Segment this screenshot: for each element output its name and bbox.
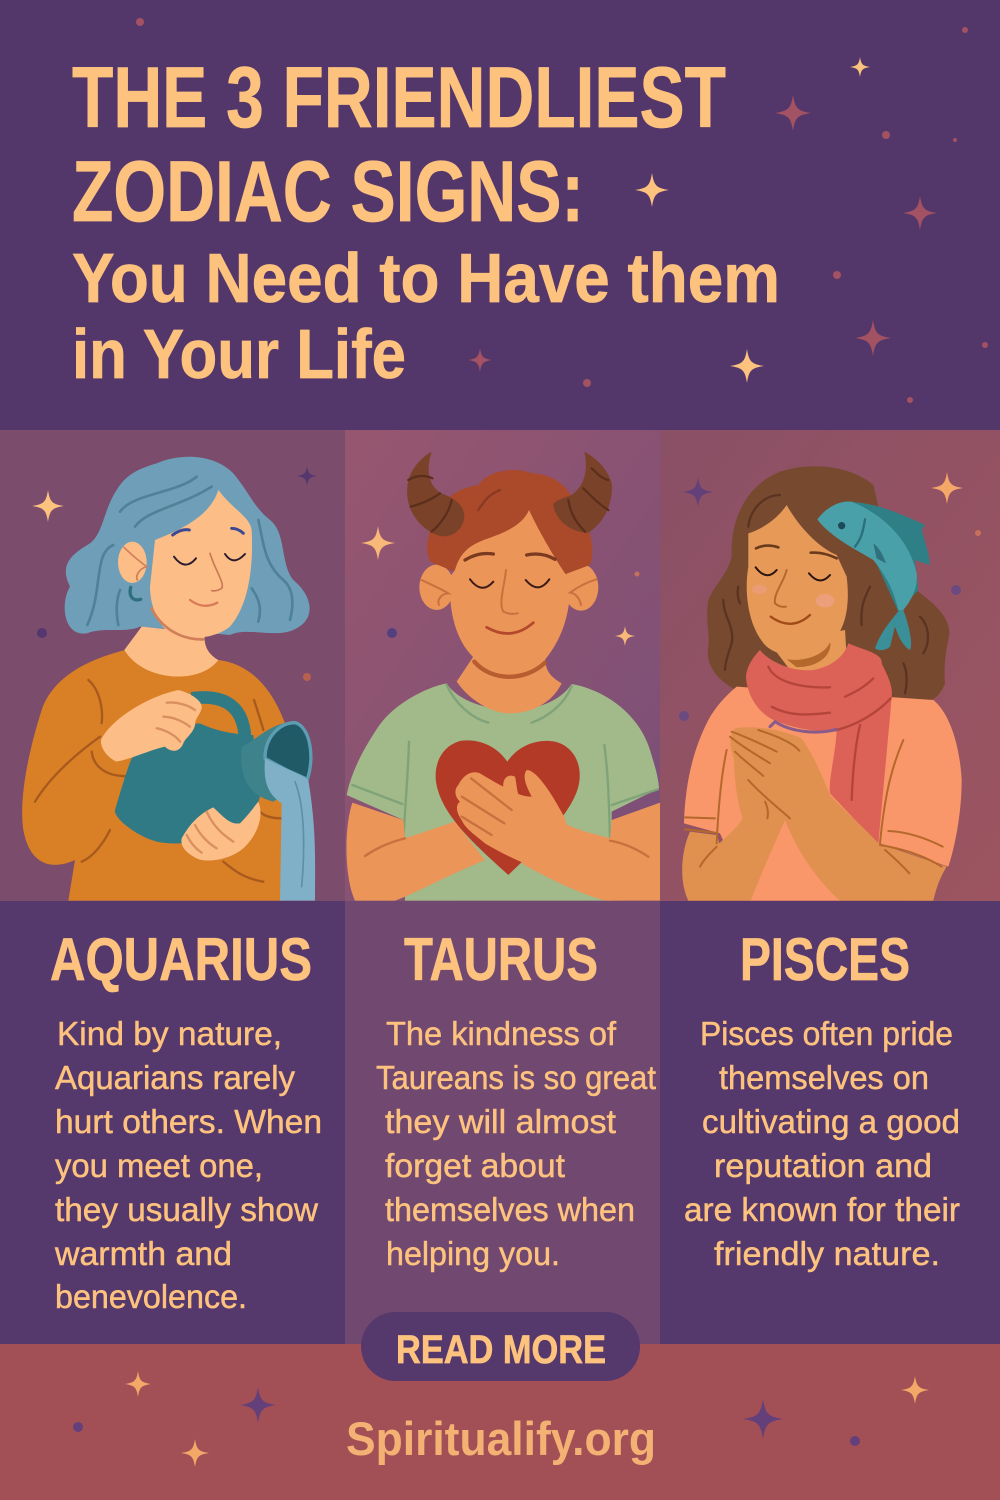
decorative stars (136, 18, 988, 403)
description: aquarius: warmth and (54, 1235, 232, 1272)
hand on heart (365, 770, 648, 870)
description: aquarius: you meet one, (55, 1147, 263, 1184)
footer stars (73, 1371, 929, 1467)
description: pisces: are known for their (684, 1191, 960, 1228)
description: pisces: friendly nature. (714, 1235, 940, 1272)
horns (407, 452, 612, 536)
head (118, 490, 252, 639)
description: taurus: forget about (385, 1147, 565, 1184)
description: taurus: helping you. (386, 1235, 560, 1272)
heart (436, 740, 580, 875)
water stream (265, 758, 315, 901)
neck (124, 627, 218, 677)
description: aquarius: they usually show (55, 1191, 318, 1228)
column: taurus (345, 430, 660, 1344)
description: aquarius: Kind by nature, (57, 1015, 282, 1052)
description: aquarius: hurt others. When (55, 1103, 322, 1140)
read more button (361, 1312, 640, 1381)
stars and dots: taurus (361, 526, 640, 646)
subtitle: You Need to Have them (72, 239, 780, 317)
neck and face (747, 505, 848, 672)
t-shirt (684, 687, 962, 901)
description: aquarius (54, 1015, 322, 1315)
heading: pisces: PISCES (740, 926, 910, 993)
description: taurus: Taureans is so great (376, 1059, 656, 1096)
description: pisces: reputation and (714, 1147, 932, 1184)
left arm (346, 803, 485, 901)
arms and hands (682, 727, 947, 901)
figure: pisces woman with fish (682, 466, 962, 901)
heading: aquarius: AQUARIUS (50, 926, 312, 993)
header panel (0, 0, 1000, 430)
sweater (22, 650, 285, 901)
title: THE 3 FRIENDLIEST (72, 50, 726, 146)
description: taurus: The kindness of (386, 1015, 617, 1052)
subtitle (72, 239, 780, 393)
right arm (522, 803, 660, 901)
description: taurus (376, 1015, 656, 1272)
description: pisces: cultivating a good (702, 1103, 960, 1140)
heading: taurus: TAURUS (404, 926, 598, 993)
description: aquarius: Aquarians rarely (55, 1059, 295, 1096)
neck (457, 657, 562, 713)
stars and dots: pisces (679, 472, 981, 721)
description: pisces: Pisces often pride (700, 1015, 953, 1052)
column: pisces (660, 430, 1000, 1344)
hands (101, 690, 261, 860)
subtitle: in Your Life (72, 315, 406, 393)
description: aquarius: benevolence. (55, 1278, 247, 1315)
figure: aquarius woman pouring water (22, 457, 315, 901)
fish (817, 502, 930, 650)
website: Spiritualify.org (346, 1412, 656, 1465)
head (419, 470, 598, 677)
hair (707, 466, 949, 701)
description: pisces (684, 1015, 960, 1272)
description: pisces: themselves on (719, 1059, 929, 1096)
description: taurus: themselves when (385, 1191, 635, 1228)
description: taurus: they will almost (385, 1103, 616, 1140)
read more button: READ MORE (396, 1328, 606, 1372)
scarf (746, 643, 892, 843)
title: ZODIAC SIGNS: (72, 144, 584, 240)
figure: taurus man with horns and heart (346, 452, 660, 901)
hair (65, 457, 310, 635)
title (72, 50, 726, 240)
t-shirt (347, 683, 659, 901)
stars and dots: aquarius (32, 466, 317, 681)
column: aquarius (0, 430, 345, 1344)
jug (115, 697, 311, 844)
footer band (0, 1344, 1000, 1500)
